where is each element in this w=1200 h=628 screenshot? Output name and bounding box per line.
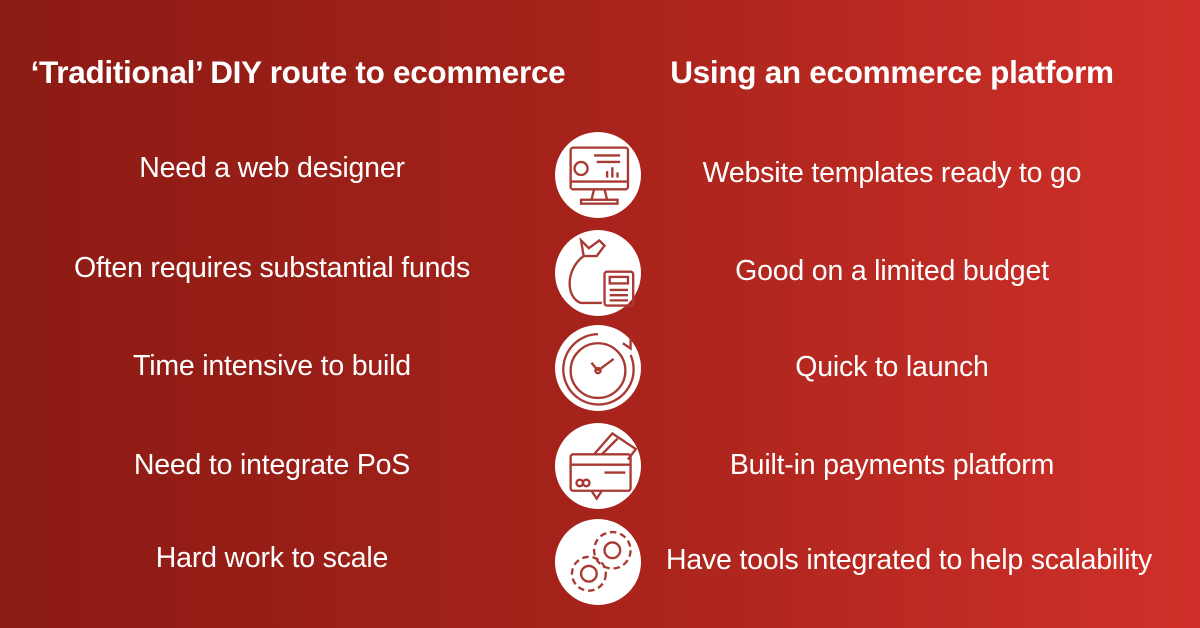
icon: credit cards [555, 423, 641, 509]
left item 1: Need a web designer [139, 152, 405, 184]
left item 2: Often requires substantial funds [74, 252, 470, 284]
right item 5: Have tools integrated to help scalability [666, 544, 1152, 576]
icon: clock [555, 325, 641, 411]
right item 1: Website templates ready to go [703, 157, 1081, 189]
icon: money bag and calculator [555, 230, 641, 316]
left item 3: Time intensive to build [133, 350, 411, 382]
icon: gears [555, 519, 641, 605]
heading: traditional: ‘Traditional’ DIY route to ecommerce [31, 54, 565, 90]
icon: monitor [555, 132, 641, 218]
left item 4: Need to integrate PoS [134, 449, 410, 481]
right item 4: Built-in payments platform [730, 449, 1054, 481]
heading: platform: Using an ecommerce platform [670, 54, 1114, 90]
right item 3: Quick to launch [795, 351, 989, 383]
left item 5: Hard work to scale [156, 542, 388, 574]
right item 2: Good on a limited budget [735, 255, 1049, 287]
